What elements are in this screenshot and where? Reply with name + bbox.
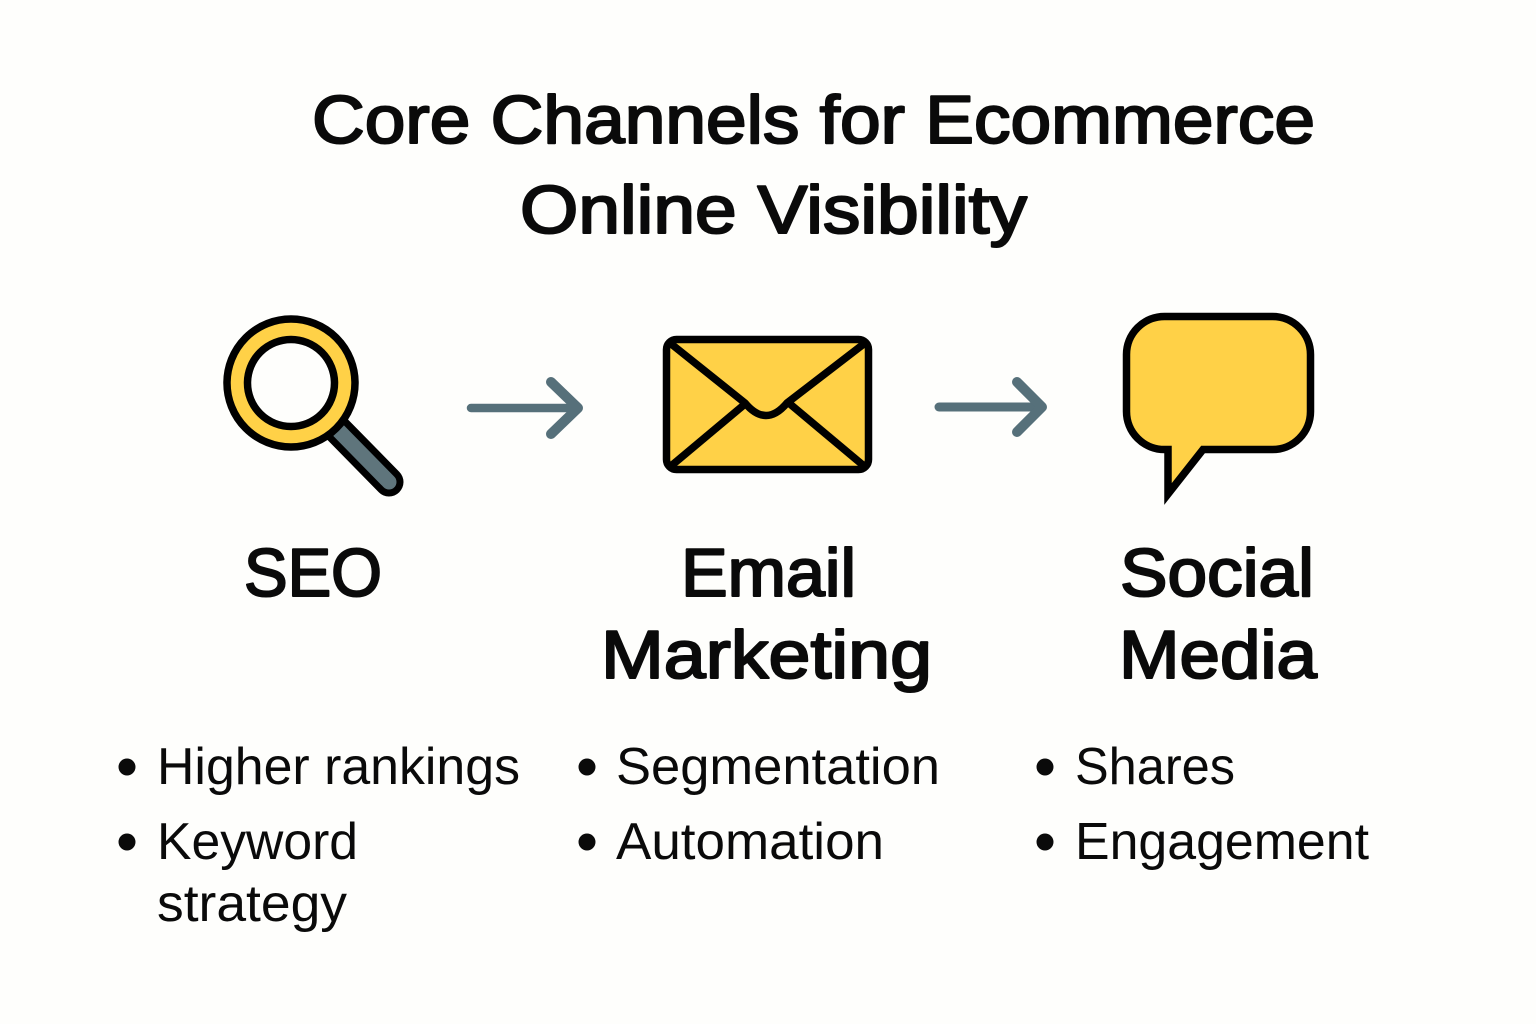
bullet list: Social Media: Shares	[1075, 738, 1235, 796]
heading: Social Media: Media	[1119, 617, 1317, 693]
arrow: Email Marketing to Social Media	[939, 382, 1042, 432]
title: Online Visibility	[520, 172, 1027, 248]
panel: Social Media	[1036, 316, 1370, 871]
bullet list: SEO: strategy	[157, 875, 347, 933]
panel: SEO	[118, 319, 520, 933]
title: Core Channels for Ecommerce	[312, 82, 1315, 158]
heading: Social Media: Social	[1120, 535, 1314, 611]
heading: Social Media	[1119, 535, 1317, 693]
bullet list: Social Media: Engagement	[1075, 813, 1370, 871]
bullet list: Social Media	[1036, 738, 1370, 871]
bullet list: Email Marketing	[578, 738, 940, 871]
heading: Email Marketing: Email	[681, 535, 856, 611]
bullet list: SEO: Keyword	[157, 813, 358, 871]
title	[312, 82, 1315, 248]
icon: envelope	[666, 340, 868, 470]
bullet list: SEO	[118, 738, 520, 933]
arrow: SEO to Email Marketing	[471, 382, 578, 434]
panel: Email Marketing	[578, 340, 940, 871]
icon: magnifying glass	[227, 319, 389, 482]
heading: SEO: SEO	[244, 535, 382, 611]
bullet list: Email Marketing: Automation	[616, 813, 884, 871]
bullet list: Email Marketing: Segmentation	[616, 738, 940, 796]
icon: speech bubble	[1126, 316, 1310, 494]
heading: Email Marketing: Marketing	[601, 617, 932, 693]
heading: Email Marketing	[601, 535, 932, 693]
bullet list: SEO: Higher rankings	[157, 738, 520, 796]
